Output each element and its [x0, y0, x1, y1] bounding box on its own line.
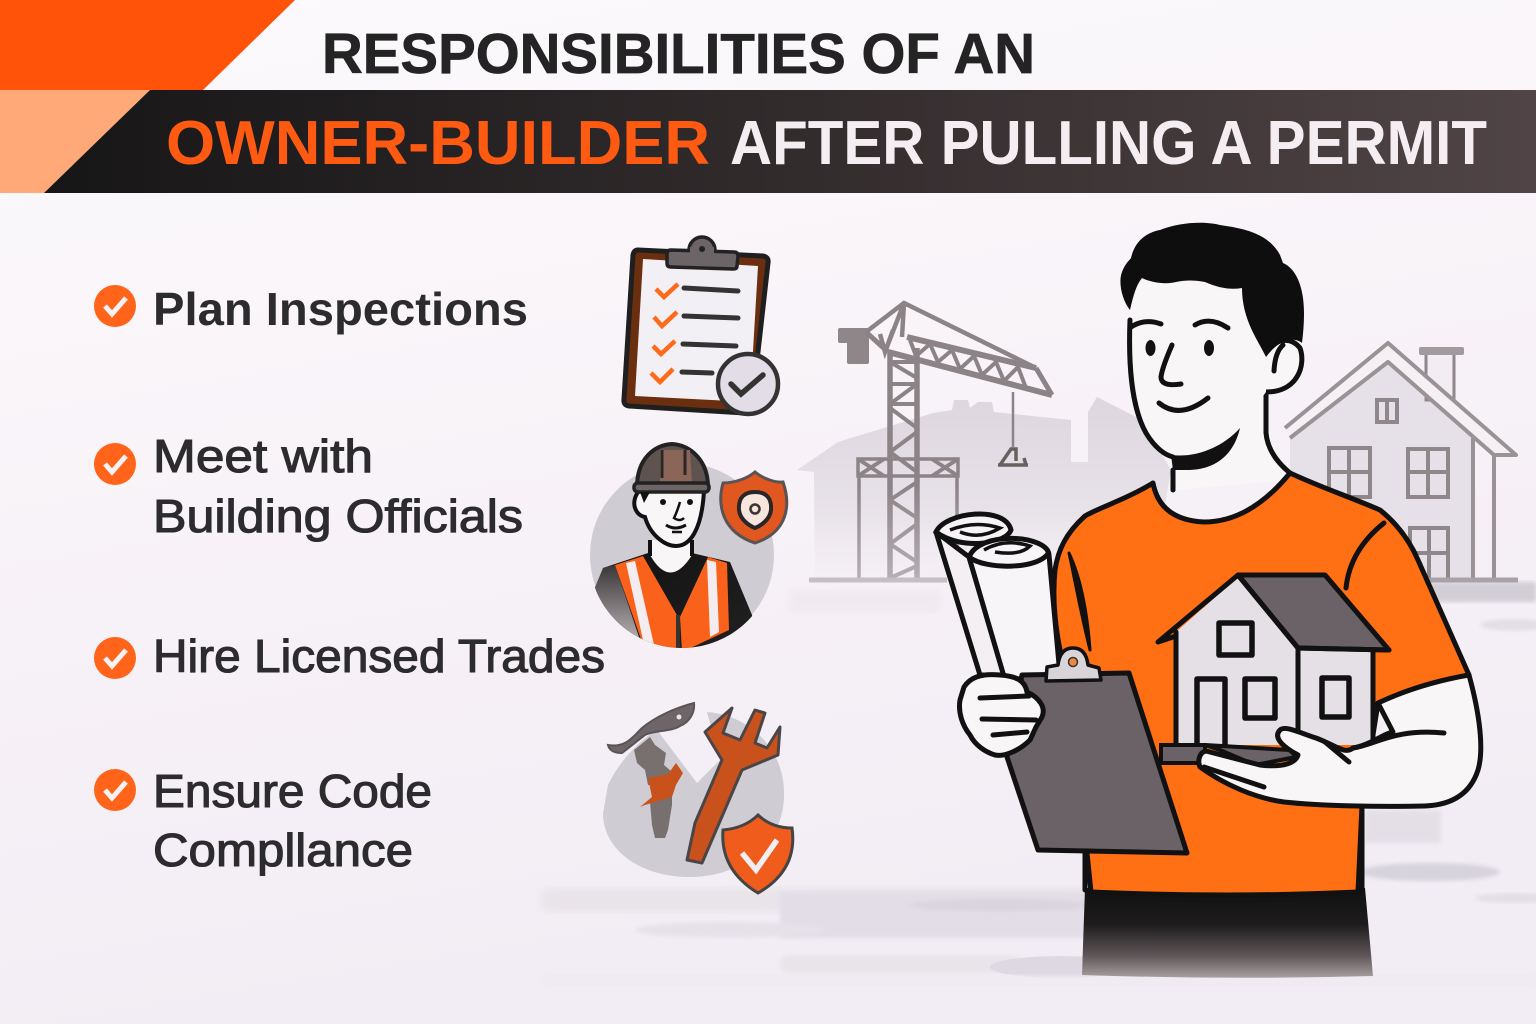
icon: building official	[590, 444, 774, 660]
list item: meet with building officials: Building Officials	[153, 490, 523, 542]
shirt folds	[1346, 523, 1384, 588]
background crane	[809, 303, 1052, 580]
list item: ensure code compliance: Ensure Code	[153, 765, 432, 817]
trousers	[1082, 888, 1373, 978]
list item: meet with building officials: Meet with	[153, 430, 373, 482]
model house	[1158, 575, 1389, 765]
background house	[1285, 343, 1518, 580]
header banner	[0, 0, 1536, 193]
list item: ensure code compliance: Compllance	[153, 824, 413, 876]
icon: safety badge	[721, 472, 787, 543]
ground shadows	[540, 582, 1536, 985]
icon: tools and shield	[603, 703, 793, 893]
left hand	[959, 675, 1043, 755]
big clipboard	[1007, 648, 1187, 853]
list item: ensure code compliance	[94, 765, 432, 876]
title line 2: AFTER PULLING A PERMIT	[730, 109, 1487, 178]
beard shadow	[1171, 428, 1240, 470]
list item: plan inspections: Plan Inspections	[153, 283, 528, 335]
icon: inspection clipboard	[624, 237, 778, 414]
neck lines	[1173, 392, 1290, 490]
dark title bar	[44, 90, 1536, 193]
face features	[1131, 322, 1161, 327]
blueprint rolls	[936, 514, 1060, 680]
list item: meet with building officials	[94, 430, 523, 542]
title line 1: RESPONSIBILITIES OF AN	[322, 22, 1035, 86]
background building silhouette	[797, 397, 1171, 590]
list item: hire licensed trades: Hire Licensed Trades	[153, 630, 605, 682]
t-shirt	[1054, 473, 1469, 895]
ear	[1266, 340, 1302, 392]
title line 2: OWNER-BUILDER	[166, 109, 710, 178]
orange corner	[0, 0, 295, 90]
head	[1130, 275, 1268, 457]
peach corner	[0, 90, 150, 193]
right arm and hand	[1199, 675, 1481, 806]
neck	[1173, 390, 1290, 490]
person: owner-builder	[936, 223, 1481, 978]
hair	[1120, 223, 1304, 357]
